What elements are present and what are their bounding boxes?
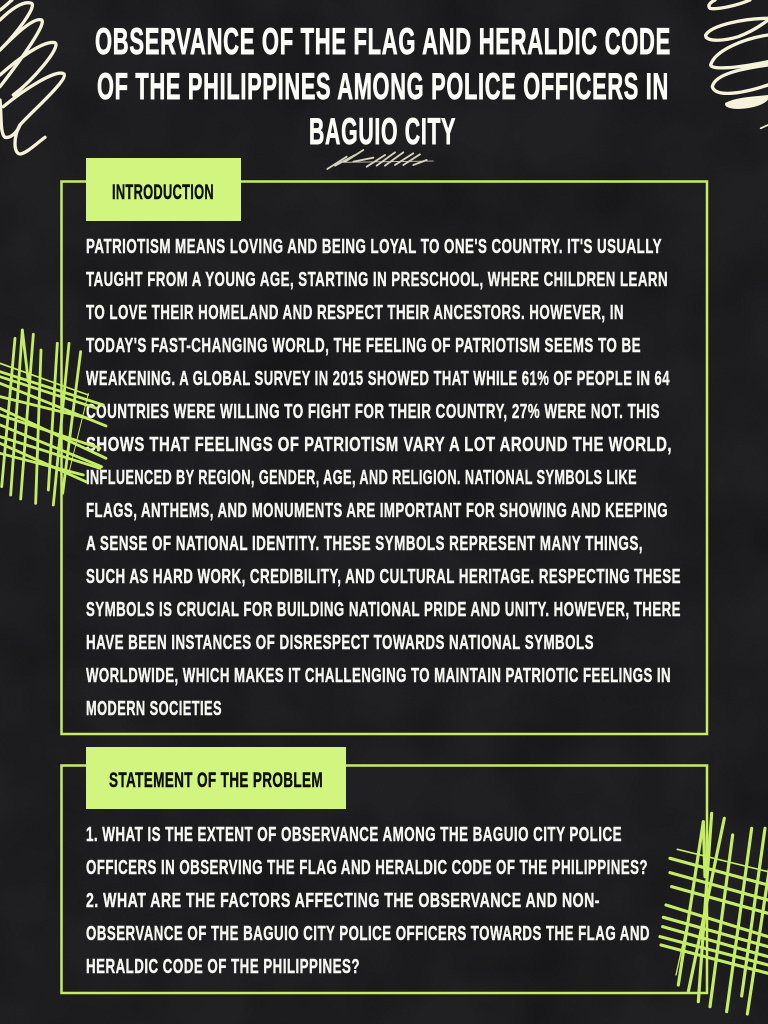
text block: introduction body <box>86 235 681 720</box>
text block: problem questions <box>86 823 650 978</box>
text block: problem questions: HERALDIC CODE OF THE PHILIPPINES? <box>86 955 360 978</box>
text block: introduction body: MODERN SOCIETIES <box>86 697 222 720</box>
title <box>95 21 671 152</box>
scribble: top right <box>706 0 768 128</box>
title underline scribble <box>327 150 433 169</box>
title: BAGUIO CITY <box>309 111 456 152</box>
heading tab: introduction <box>86 158 241 221</box>
panel frame: statement of the problem <box>62 766 707 993</box>
panel frame: introduction <box>62 182 707 734</box>
heading tab: introduction: INTRODUCTION <box>112 181 214 204</box>
heading tab: statement of the problem: STATEMENT OF THE PROBLEM <box>109 769 323 792</box>
crosshatch: right <box>660 813 768 1014</box>
panel: statement of the problem <box>62 747 707 993</box>
heading tab: statement of the problem <box>86 747 346 809</box>
crosshatch: left <box>0 330 106 505</box>
scribble: top left <box>0 0 64 154</box>
panel: introduction <box>62 158 707 734</box>
